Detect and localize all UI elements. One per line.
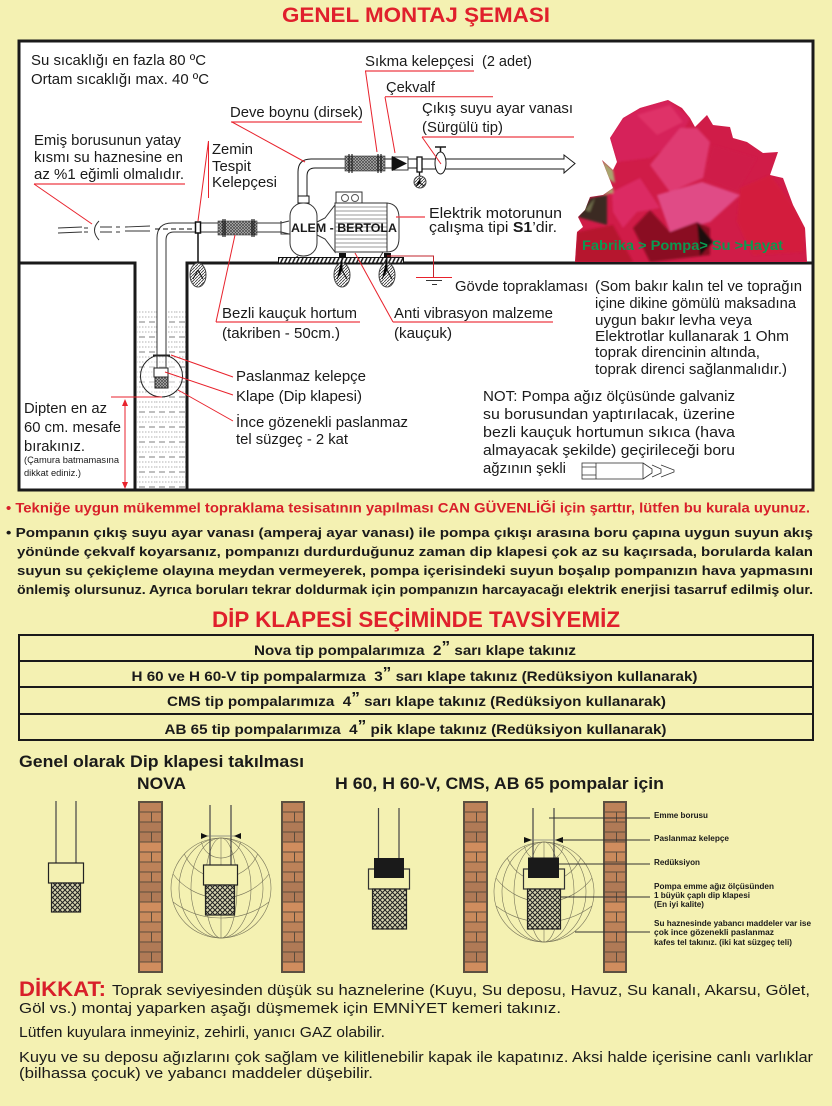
table row 2: ” (383, 665, 391, 682)
label: suction slope note: Emiş borusunun yatay (34, 132, 181, 149)
foot valve strainer (140, 355, 182, 397)
label: motor type (396, 205, 562, 236)
table row 1: Nova tip pompalarımıza 2 (254, 642, 427, 658)
callout labels: kafes tel takınız. (iki kat süzgeç teli) (654, 938, 792, 947)
label: grounding note: toprak direncinin altında, (595, 344, 760, 361)
table row 3: sarı klape takınız (Redüksiyon kullanarak) (360, 693, 666, 709)
title: GENEL MONTAJ ŞEMASI (282, 4, 550, 27)
label: check valve: Çekvalf (386, 79, 436, 96)
paragraph: check valve advice (6, 525, 813, 597)
label: grounding note: toprak direnci sağlanmalıdır.) (595, 361, 787, 378)
label: elbow: Deve boynu (dirsek) (230, 104, 363, 121)
label: grounding note: (Som bakır kalın tel ve toprağın (595, 278, 802, 295)
warning text: Lütfen kuyulara inmeyiniz, zehirli, yanıcı GAZ olabilir. (19, 1024, 385, 1041)
label: clamp: (2 adet) (482, 53, 532, 70)
fitting and anchor (414, 157, 426, 188)
warning text (19, 982, 813, 1082)
table row 3: CMS tip pompalarımıza 4 (167, 693, 337, 709)
temperature note (31, 52, 209, 88)
note: pipe mouth: su borusundan yaptırılacak, üzerine (483, 406, 735, 423)
label: motor type: Elektrik motorunun (429, 205, 562, 222)
label: rubber hose: Bezli kauçuk hortum (222, 305, 357, 322)
note: pipe mouth (483, 388, 736, 477)
label: foot valve parts (165, 355, 408, 448)
table row 3: ” (351, 690, 360, 707)
label: outlet valve (422, 100, 574, 164)
label: floor clamp (198, 141, 277, 221)
motor anchors (334, 257, 395, 287)
callout labels: (En iyi kalite) (654, 900, 704, 909)
label: rubber hose: (takriben - 50cm.) (222, 325, 340, 342)
warning text: Toprak seviyesinden düşük su haznelerine (Kuyu, Su deposu, Havuz, Su kanalı, Akarsu, Gölet, (112, 982, 810, 999)
heading: foot valve mounting: Genel olarak Dip klapesi takılması (19, 752, 304, 771)
heading: H60 group: H 60, H 60-V, CMS, AB 65 pompalar için (335, 774, 664, 793)
label: grounding note (455, 278, 802, 378)
label: grounding note: Elektrotlar kullanarak 1 Ohm (595, 328, 789, 345)
label: floor clamp: Tespit (212, 158, 252, 175)
label: motor type: çalışma tipi S1’dir. (429, 219, 557, 236)
suction rubber hose (218, 219, 257, 237)
discharge pipe (298, 159, 417, 203)
brick wall right (282, 802, 304, 972)
flower photo (570, 95, 815, 265)
note: pipe mouth: bezli kauçuk hortumun sıkıca (hava (483, 424, 736, 441)
check valve (392, 156, 408, 171)
table row 1: sarı klape takınız (450, 642, 576, 658)
panel: installation diagram (19, 41, 815, 490)
label: bottom distance: bırakınız. (24, 438, 85, 455)
paragraph: check valve advice: suyun su çekiçleme olayına meydan vermeyerek, pompa içerisindeki suyun boşalıp pompanızın hava yapmasını (17, 563, 813, 578)
label: rubber hose (216, 235, 360, 342)
warning: grounding: • Tekniğe uygun mükemmel topraklama tesisatının yapılması CAN GÜVENLİĞİ için şarttır, lütfen bu kurala uyunuz. (6, 500, 810, 516)
label: check valve (385, 79, 493, 153)
table row 4: pik klape takınız (Redüksiyon kullanarak) (366, 721, 666, 737)
callout labels: Pompa emme ağız ölçüsünden (654, 882, 774, 891)
label: foot valve parts: Klape (Dip klapesi) (236, 388, 362, 405)
warning text: Göl vs.) montaj yaparken aşağı düşmemek için EMNİYET kemeri takınız. (19, 999, 561, 1017)
label: foot valve parts: tel süzgeç - 2 kat (236, 431, 349, 448)
label: bottom distance: (Çamura batmamasına (24, 455, 119, 465)
table: recommendations (19, 635, 813, 740)
label: anti vibration: (kauçuk) (394, 325, 452, 342)
paragraph: check valve advice: önlemiş olursunuz. Ayrıca boruları tekrar doldurmak için pompanızın harcayacağı elektrik enerjisi tasarruf edilmiş olur. (17, 582, 813, 597)
table row 4: ” (358, 718, 366, 735)
floor clamp and anchor (190, 222, 206, 287)
note: pipe mouth: NOT: Pompa ağız ölçüsünde galvaniz (483, 388, 735, 405)
icon: nova foot valve (48, 801, 84, 912)
label: foot valve parts: İnce gözenekli paslanmaz (236, 413, 408, 431)
warning text: (bilhassa çocuk) ve yabancı maddeler düşebilir. (19, 1065, 373, 1082)
note: pipe mouth: ağzının şekli (483, 460, 566, 477)
outlet arrow (422, 155, 575, 173)
outlet gate valve (435, 147, 446, 174)
temperature note: Su sıcaklığı en fazla 80 ºC (31, 52, 206, 69)
heading: foot valve recommendation: DİP KLAPESİ SEÇİMİNDE TAVSİYEMİZ (212, 607, 620, 632)
label: floor clamp: Kelepçesi (212, 174, 277, 191)
table row 1: ” (441, 639, 450, 656)
icon: pipe mouth shape (582, 463, 674, 479)
callout labels (654, 811, 812, 947)
H60 valve in strainer (494, 808, 594, 942)
callout labels: 1 büyük çaplı dip klapesi (654, 891, 750, 900)
label: clamp (365, 53, 532, 152)
table row 2: sarı klape takınız (Redüksiyon kullanarak) (391, 668, 698, 684)
flower slogan: Fabrika > Pompa> Su >Hayat (582, 238, 784, 253)
callout labels: Paslanmaz kelepçe (654, 834, 730, 843)
callout labels: çok ince gözenekli paslanmaz (654, 928, 774, 937)
label: suction slope note: kısmı su haznesine en (34, 149, 183, 166)
icon: H60 foot valve (368, 808, 410, 929)
brick wall 4 (604, 802, 626, 972)
label: floor clamp: Zemin (212, 141, 253, 158)
water in well (137, 310, 187, 489)
callout labels: Redüksiyon (654, 858, 700, 867)
warning text: Kuyu ve su deposu ağızlarını çok sağlam ve kilitlenebilir kapak ile kapatınız. Aksi halde içerisine canlı varlıklar (19, 1049, 813, 1066)
table row 4: AB 65 tip pompalarımıza 4 (164, 721, 343, 737)
pump and motor (281, 192, 399, 261)
ground slabs (19, 263, 813, 490)
callout labels: Su haznesinde yabancı maddeler var ise (654, 919, 812, 928)
brick wall 3 (464, 802, 487, 972)
suction pipe (58, 221, 281, 355)
label: suction slope note (34, 132, 185, 224)
label: elbow (230, 104, 363, 162)
label: suction slope note: az %1 eğimli olmalıdır. (34, 166, 184, 183)
discharge rubber hose (345, 154, 385, 173)
callout lines (549, 818, 650, 932)
depth dimension arrow (111, 397, 162, 489)
brick wall left (139, 802, 162, 972)
label: bottom distance: 60 cm. mesafe (24, 419, 121, 436)
pump brand: ALEM - BERTOLA (291, 221, 397, 235)
paragraph: check valve advice: yönünde çekvalf koyarsanız, pompanızı durdurduğunuz zaman dip klapesi çok az su kaçırsada, borularda kalan (17, 544, 813, 559)
label: grounding note: uygun bakır levha veya (595, 312, 753, 329)
label: foot valve parts: Paslanmaz kelepçe (236, 368, 366, 385)
label: anti vibration: Anti vibrasyon malzeme (394, 305, 553, 322)
label: bottom distance: dikkat ediniz.) (24, 468, 81, 478)
table row 2: H 60 ve H 60-V tip pompalarmıza 3 (132, 668, 363, 684)
note: pipe mouth: almayacak şekilde) geçirileceği boru (483, 442, 735, 459)
warning: attention: DİKKAT: (19, 978, 106, 1001)
label: clamp: Sıkma kelepçesi (365, 53, 474, 70)
label: grounding note: Gövde topraklaması (455, 278, 588, 295)
heading: NOVA: NOVA (137, 774, 186, 793)
anti vibration base (278, 258, 404, 263)
label: anti vibration (355, 253, 553, 342)
label: grounding note: içine dikine gömülü maksadına (595, 295, 797, 312)
callout labels: Emme borusu (654, 811, 708, 820)
label: outlet valve: (Sürgülü tip) (422, 119, 503, 136)
temperature note: Ortam sıcaklığı max. 40 ºC (31, 71, 209, 88)
label: outlet valve: Çıkış suyu ayar vanası (422, 100, 573, 117)
label: bottom distance: Dipten en az (24, 400, 107, 417)
ground symbol (387, 256, 452, 284)
nova valve in strainer (171, 805, 271, 938)
label: bottom distance (24, 400, 121, 478)
paragraph: check valve advice: • Pompanın çıkış suyu ayar vanası (amperaj ayar vanası) ile pompa çıkışı arasına boru çapına uygun suyun akış (6, 525, 813, 540)
